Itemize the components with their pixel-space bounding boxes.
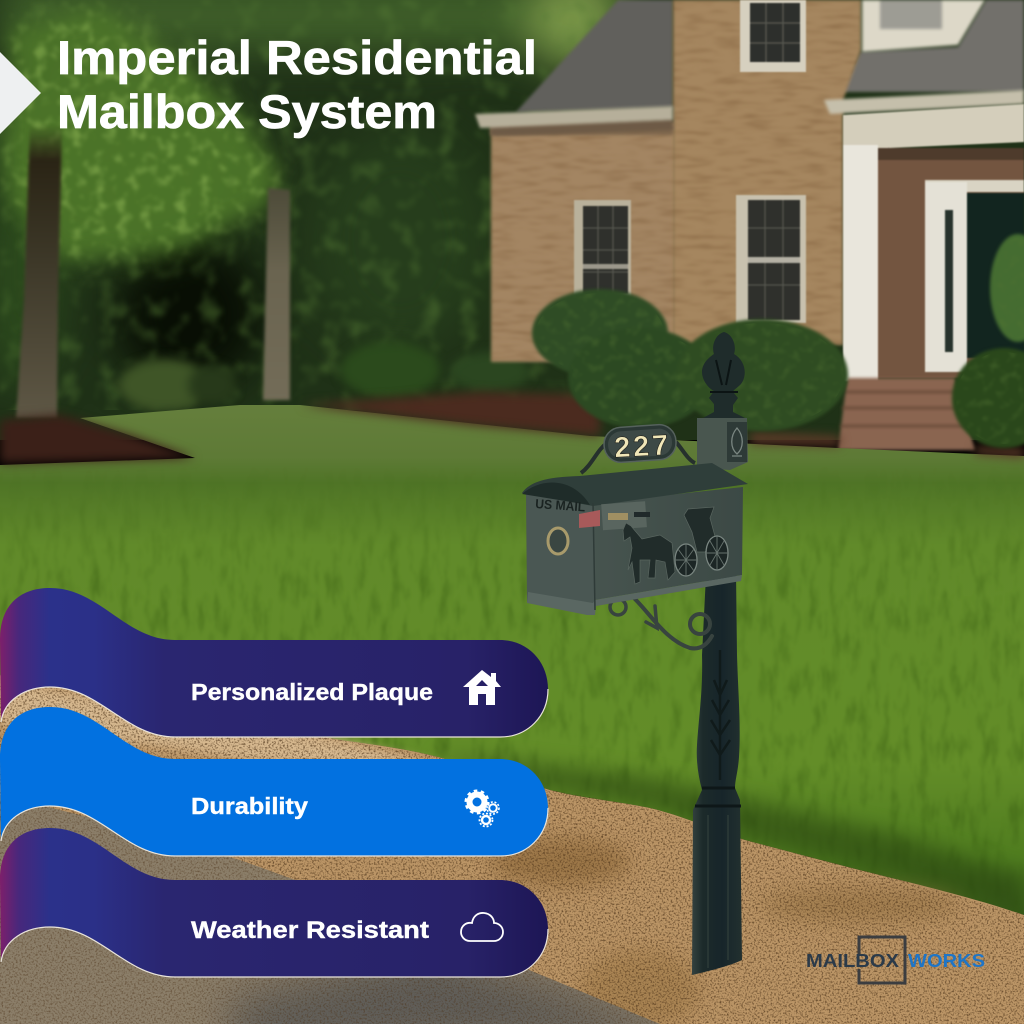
feature ribbon: personalized plaque xyxy=(0,588,548,737)
lawn xyxy=(0,405,1024,915)
gravel path xyxy=(0,675,1024,1024)
icon: house xyxy=(463,670,501,705)
scroll bracket xyxy=(610,596,712,648)
door ring xyxy=(548,528,568,554)
number plaque: 227 xyxy=(613,430,669,464)
house: brick steps xyxy=(838,378,975,450)
product: imperial mailbox on post xyxy=(522,332,748,975)
house: eaves xyxy=(475,90,1024,136)
mulch beds xyxy=(0,392,1024,463)
red flag xyxy=(579,510,600,528)
house: porch and entry xyxy=(843,104,1024,381)
brand logo: Mailbox Works xyxy=(806,937,985,983)
icon: gears xyxy=(466,791,499,826)
foundation shrubs xyxy=(532,234,1024,448)
feature ribbon: weather resistant: Weather Resistant xyxy=(191,917,429,944)
number plaque xyxy=(581,424,695,473)
title xyxy=(57,31,537,138)
icon: cloud xyxy=(461,913,503,941)
title arrow marker xyxy=(0,52,41,134)
low shrubs by the trees xyxy=(119,342,530,411)
house: left wing roof xyxy=(516,0,673,112)
feature ribbon: personalized plaque: Personalized Plaque xyxy=(191,679,433,705)
finial and cap block xyxy=(697,332,748,470)
brand logo: Mailbox Works: MAILBOX xyxy=(806,951,899,971)
house: dormer xyxy=(862,0,985,52)
title: Imperial Residential xyxy=(57,31,537,84)
post xyxy=(692,572,742,975)
house: windows xyxy=(574,0,806,323)
tree backdrop xyxy=(0,0,1024,440)
feature ribbon: durability xyxy=(0,707,548,856)
house: right roof xyxy=(841,0,1024,92)
tree trunks xyxy=(16,125,290,418)
title: Mailbox System xyxy=(57,85,437,138)
feature ribbon: durability: Durability xyxy=(191,793,308,819)
brand logo: Mailbox Works: WORKS xyxy=(908,951,985,971)
house: brick walls xyxy=(491,0,861,362)
feature ribbon: weather resistant xyxy=(0,828,548,977)
asphalt driveway xyxy=(0,795,700,1024)
mailbox body xyxy=(522,463,748,615)
horse and carriage relief xyxy=(623,507,728,584)
US MAIL lettering: US MAIL xyxy=(535,496,586,514)
